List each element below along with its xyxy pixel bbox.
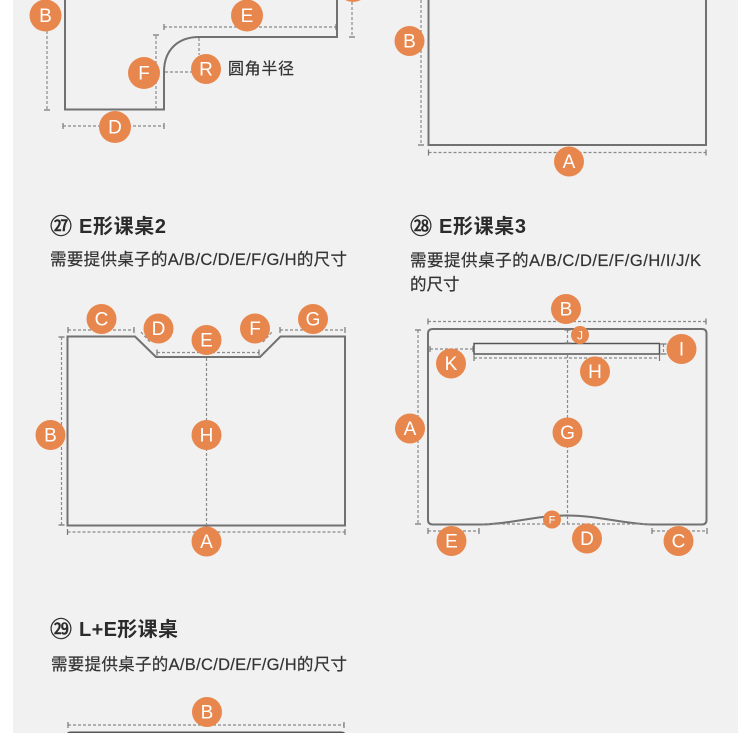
desk outline	[428, 0, 706, 145]
marker E: E	[200, 330, 213, 352]
marker C	[86, 304, 116, 334]
marker E	[231, 0, 263, 32]
marker D	[144, 314, 174, 344]
marker A	[192, 526, 222, 556]
marker B: B	[560, 300, 572, 320]
panel: item 27 E-shaped desk 2	[36, 214, 347, 556]
marker F	[240, 314, 270, 344]
marker G: G	[560, 423, 575, 444]
diagram: previous desk, lower-right part	[394, 0, 706, 176]
marker J	[571, 326, 589, 344]
description: 的尺寸	[410, 275, 460, 294]
marker B	[30, 0, 62, 32]
marker G	[298, 304, 328, 334]
marker D	[572, 524, 602, 554]
marker K	[436, 348, 466, 378]
heading: E形课桌3	[439, 215, 526, 238]
marker A: A	[563, 152, 576, 173]
marker G: G	[306, 310, 320, 330]
slot rectangle	[474, 344, 660, 354]
marker cut off at top	[337, 0, 369, 2]
marker H: H	[200, 426, 213, 446]
marker B	[36, 420, 66, 450]
marker E: E	[241, 6, 253, 27]
desk outline with curved front edge	[428, 329, 706, 524]
heading: E形课桌2	[79, 215, 166, 238]
marker B: B	[39, 6, 52, 27]
marker J: J	[577, 328, 583, 342]
marker D	[99, 111, 131, 143]
marker B: B	[201, 702, 213, 724]
marker K: K	[445, 354, 458, 375]
marker R	[191, 54, 221, 84]
marker A	[395, 414, 425, 444]
marker F: F	[249, 319, 261, 340]
marker H: H	[588, 362, 602, 383]
marker H	[192, 420, 222, 450]
label: corner radius: 圆角半径	[228, 60, 294, 78]
marker A: A	[200, 532, 213, 553]
marker E: E	[445, 532, 458, 552]
marker B	[551, 294, 581, 324]
description: 需要提供桌子的A/B/C/D/E/F/G/H的尺寸	[51, 655, 347, 674]
marker F: F	[549, 514, 556, 526]
heading: ㉗	[50, 214, 72, 239]
desk outline with rounded corner	[65, 0, 337, 110]
marker C: C	[672, 532, 685, 552]
heading: ㉘	[410, 214, 432, 239]
marker I	[666, 334, 696, 364]
marker F	[543, 510, 561, 528]
marker B	[192, 697, 222, 727]
heading: ㉙	[50, 617, 72, 642]
diagram: previous desk, lower-left part	[30, 0, 369, 143]
panel: item 28 E-shaped desk 3	[395, 214, 707, 556]
marker I: I	[679, 340, 684, 360]
desk outline	[68, 336, 345, 526]
marker H	[580, 356, 610, 386]
dimension lines	[58, 327, 345, 535]
panel: item 29 L+E-shaped desk	[50, 617, 347, 733]
marker E	[192, 325, 222, 355]
marker A: A	[404, 419, 417, 440]
marker R: R	[199, 60, 213, 80]
marker C: C	[95, 310, 108, 330]
marker F	[128, 57, 160, 89]
marker G	[552, 418, 582, 448]
marker A	[554, 146, 584, 176]
marker B	[394, 26, 424, 56]
marker F: F	[138, 64, 150, 84]
marker B: B	[44, 426, 57, 446]
desk outline top edge	[67, 732, 345, 733]
description: 需要提供桌子的A/B/C/D/E/F/G/H的尺寸	[50, 250, 347, 269]
marker B: B	[403, 32, 416, 52]
heading: L+E形课桌	[79, 618, 178, 641]
dimension line B	[68, 722, 344, 728]
marker E	[436, 526, 466, 556]
dimension lines A, B	[418, 0, 706, 156]
marker C	[664, 526, 694, 556]
description: 需要提供桌子的A/B/C/D/E/F/G/H/I/J/K	[410, 251, 701, 270]
dimension lines B, D, E, F, R	[44, 2, 355, 129]
marker D: D	[108, 118, 122, 138]
dimension lines	[415, 318, 707, 534]
marker D: D	[580, 529, 594, 550]
marker D: D	[152, 319, 165, 340]
